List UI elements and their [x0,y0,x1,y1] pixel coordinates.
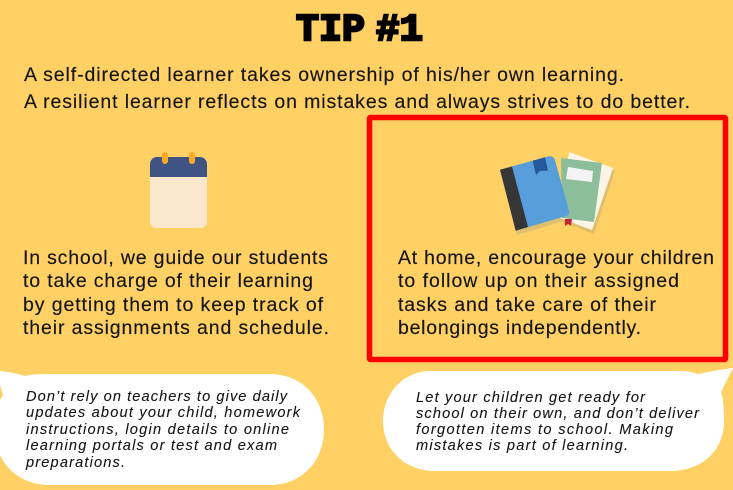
at home text: At home, encourage your children [398,247,714,269]
callout: left speech bubble: updates about your child, homework [26,405,301,421]
in school text: to take charge of their learning [23,270,313,292]
panel: in school [23,152,329,339]
callout: right speech bubble: school on their own, and don’t deliver [416,406,700,422]
title [296,9,423,52]
callout: left speech bubble: preparations. [25,455,125,471]
title: TIP [296,9,365,52]
callout: left speech bubble: instructions, login details to online [26,422,289,438]
intro text [24,64,690,113]
title: #1 [376,9,423,52]
icon: books [500,152,615,235]
in school text: their assignments and schedule. [23,317,329,339]
callout: right speech bubble [383,368,733,471]
in school text: In school, we guide our students [23,247,328,269]
at home text [398,247,714,339]
in school text: by getting them to keep track of [23,294,324,316]
panel: at home highlight frame [370,118,726,360]
icon: calendar [150,152,207,228]
callout: right speech bubble: Let your children get ready for [416,390,646,406]
at home text: to follow up on their assigned [398,270,679,292]
callout: left speech bubble [0,371,324,485]
callout: left speech bubble: learning portals or test and exam [26,438,277,454]
callout: right speech bubble: mistakes is part of learning. [416,438,628,454]
callout: left speech bubble: Don’t rely on teachers to give daily [26,389,289,405]
intro text: A self-directed learner takes ownership of his/her own learning. [24,64,624,86]
callout: right speech bubble: forgotten items to school. Making [416,422,673,438]
at home text: belongings independently. [398,317,641,339]
in school text [23,247,329,339]
at home text: tasks and take care of their [398,294,656,316]
intro text: A resilient learner reflects on mistakes and always strives to do better. [24,91,690,113]
